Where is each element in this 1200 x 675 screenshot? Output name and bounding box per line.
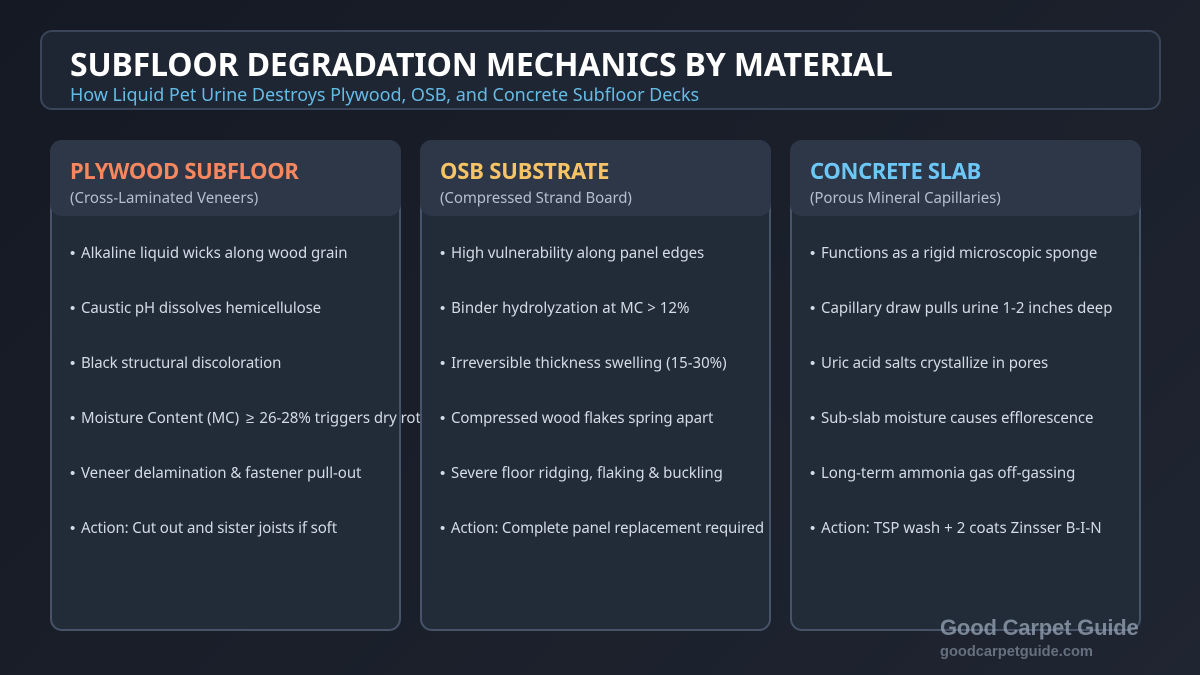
plywood point 3: • — [70, 355, 75, 372]
OSB point 4: Compressed wood flakes spring apart — [451, 408, 713, 428]
OSB point 5: Severe floor ridging, flaking & buckling — [451, 463, 723, 483]
OSB point 1: • — [440, 245, 445, 262]
concrete point 3: Uric acid salts crystallize in pores — [821, 353, 1048, 373]
plywood point 3: Black structural discoloration — [81, 353, 281, 373]
plywood point 1: • — [70, 245, 75, 262]
plywood point 2: Caustic pH dissolves hemicellulose — [81, 298, 321, 318]
OSB subheading: (Compressed Strand Board) — [440, 188, 632, 208]
plywood point 4: Moisture Content (MC) ≥ 26-28% triggers dry rot — [81, 408, 421, 428]
plywood point 5: Veneer delamination & fastener pull-out — [81, 463, 361, 483]
concrete point 5: • — [810, 465, 815, 482]
title: SUBFLOOR DEGRADATION MECHANICS BY MATERIAL — [70, 43, 893, 86]
plywood point 2: • — [70, 300, 75, 317]
plywood point 4: • — [70, 410, 75, 427]
OSB point 2: • — [440, 300, 445, 317]
concrete point 6: • — [810, 520, 815, 537]
OSB heading: OSB SUBSTRATE — [440, 156, 609, 186]
concrete point 4: Sub-slab moisture causes efflorescence — [821, 408, 1093, 428]
concrete heading: CONCRETE SLAB — [810, 156, 981, 186]
concrete point 6: Action: TSP wash + 2 coats Zinsser B-I-N — [821, 518, 1102, 538]
plywood subheading: (Cross-Laminated Veneers) — [70, 188, 258, 208]
concrete point 2: Capillary draw pulls urine 1-2 inches deep — [821, 298, 1112, 318]
concrete point 1: Functions as a rigid microscopic sponge — [821, 243, 1097, 263]
concrete panel body — [790, 140, 1141, 631]
concrete point 1: • — [810, 245, 815, 262]
watermark brand name: Good Carpet Guide — [940, 615, 1139, 640]
plywood panel header — [50, 140, 401, 216]
plywood point 6: Action: Cut out and sister joists if soft — [81, 518, 337, 538]
OSB panel header — [420, 140, 771, 216]
OSB point 3: Irreversible thickness swelling (15-30%) — [451, 353, 727, 373]
OSB point 5: • — [440, 465, 445, 482]
concrete point 2: • — [810, 300, 815, 317]
header banner — [40, 30, 1161, 110]
OSB panel body — [420, 140, 771, 631]
OSB point 4: • — [440, 410, 445, 427]
subtitle: How Liquid Pet Urine Destroys Plywood, OSB, and Concrete Subfloor Decks — [70, 83, 699, 107]
plywood panel body — [50, 140, 401, 631]
OSB point 6: • — [440, 520, 445, 537]
concrete point 5: Long-term ammonia gas off-gassing — [821, 463, 1075, 483]
concrete point 4: • — [810, 410, 815, 427]
OSB point 6: Action: Complete panel replacement required — [451, 518, 764, 538]
OSB point 1: High vulnerability along panel edges — [451, 243, 704, 263]
OSB point 3: • — [440, 355, 445, 372]
concrete subheading: (Porous Mineral Capillaries) — [810, 188, 1001, 208]
plywood heading: PLYWOOD SUBFLOOR — [70, 156, 299, 186]
plywood point 6: • — [70, 520, 75, 537]
concrete panel header — [790, 140, 1141, 216]
plywood point 5: • — [70, 465, 75, 482]
plywood point 1: Alkaline liquid wicks along wood grain — [81, 243, 347, 263]
OSB point 2: Binder hydrolyzation at MC > 12% — [451, 298, 690, 318]
watermark url: goodcarpetguide.com — [940, 644, 1093, 660]
concrete point 3: • — [810, 355, 815, 372]
